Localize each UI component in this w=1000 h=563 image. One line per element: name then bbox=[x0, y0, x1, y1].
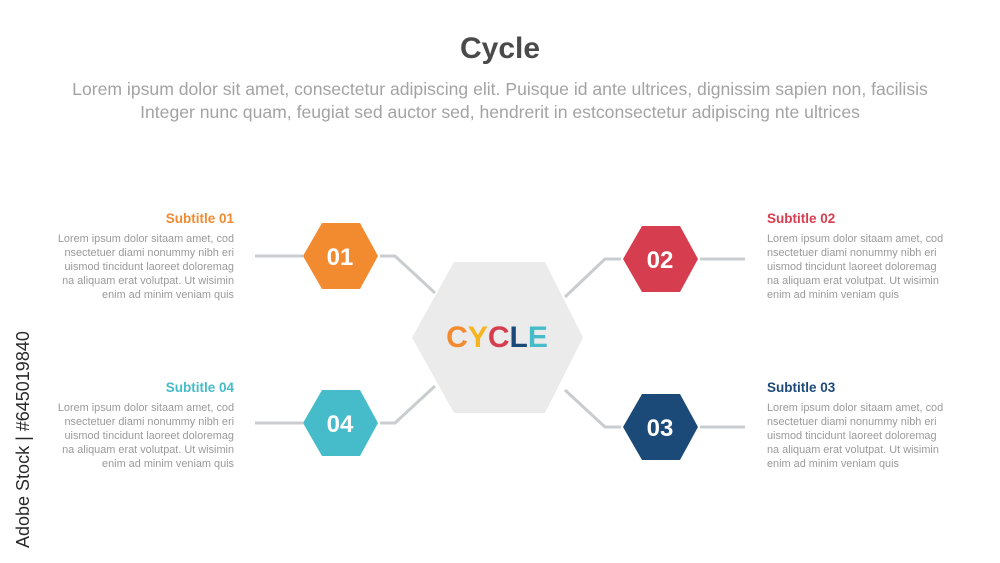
hexagon 01 bbox=[303, 223, 378, 289]
center hexagon bbox=[412, 262, 583, 413]
watermark id: Adobe Stock | #645019840 bbox=[13, 331, 33, 548]
hexagon 04 bbox=[303, 390, 378, 456]
text block 03: uismod tincidunt laoreet doloremag bbox=[767, 430, 937, 442]
text block 02 bbox=[767, 211, 943, 301]
text block 04: Lorem ipsum dolor sitaam amet, cod bbox=[58, 402, 234, 414]
text block 03: enim ad minim veniam quis bbox=[767, 458, 900, 470]
center label CYCLE: CYCLE bbox=[446, 321, 548, 354]
description text: Integer nunc quam, feugiat sed auctor sed, hendrerit in estconsectetur adipiscing nte ultrices bbox=[140, 102, 860, 122]
hexagon 01: 01 bbox=[327, 244, 353, 271]
hexagon 03: 03 bbox=[647, 415, 673, 442]
text block 02: na aliquam erat volutpat. Ut wisimin bbox=[767, 275, 939, 287]
text block 04: uismod tincidunt laoreet doloremag bbox=[64, 430, 234, 442]
text block 02: Lorem ipsum dolor sitaam amet, cod bbox=[767, 233, 943, 245]
text block 03 bbox=[767, 380, 943, 470]
hexagon 02: 02 bbox=[647, 247, 673, 274]
description text bbox=[72, 79, 928, 122]
description text: Lorem ipsum dolor sit amet, consectetur adipiscing elit. Puisque id ante ultrices, dignissim sapien non, facilisis bbox=[72, 79, 928, 99]
hexagon 03 bbox=[623, 394, 698, 460]
text block 04: nsectetuer diami nonummy nibh eri bbox=[64, 416, 234, 428]
text block 01: Subtitle 01 bbox=[166, 211, 234, 226]
text block 04: Subtitle 04 bbox=[166, 380, 234, 395]
text block 03: na aliquam erat volutpat. Ut wisimin bbox=[767, 444, 939, 456]
text block 02: uismod tincidunt laoreet doloremag bbox=[767, 261, 937, 273]
text block 03: nsectetuer diami nonummy nibh eri bbox=[767, 416, 936, 428]
text block 04: enim ad minim veniam quis bbox=[102, 458, 235, 470]
text block 01: enim ad minim veniam quis bbox=[102, 289, 235, 301]
title: Cycle bbox=[460, 32, 540, 65]
text block 04 bbox=[58, 380, 235, 470]
hexagon 04: 04 bbox=[327, 411, 354, 438]
text block 01: Lorem ipsum dolor sitaam amet, cod bbox=[58, 233, 234, 245]
text block 01: nsectetuer diami nonummy nibh eri bbox=[64, 247, 234, 259]
text block 01 bbox=[58, 211, 235, 301]
text block 01: uismod tincidunt laoreet doloremag bbox=[64, 261, 234, 273]
text block 02: Subtitle 02 bbox=[767, 211, 835, 226]
text block 03: Subtitle 03 bbox=[767, 380, 836, 395]
text block 01: na aliquam erat volutpat. Ut wisimin bbox=[62, 275, 234, 287]
text block 02: nsectetuer diami nonummy nibh eri bbox=[767, 247, 936, 259]
text block 04: na aliquam erat volutpat. Ut wisimin bbox=[62, 444, 234, 456]
text block 03: Lorem ipsum dolor sitaam amet, cod bbox=[767, 402, 943, 414]
connector lines bbox=[255, 256, 745, 427]
hexagon 02 bbox=[623, 226, 698, 292]
text block 02: enim ad minim veniam quis bbox=[767, 289, 900, 301]
